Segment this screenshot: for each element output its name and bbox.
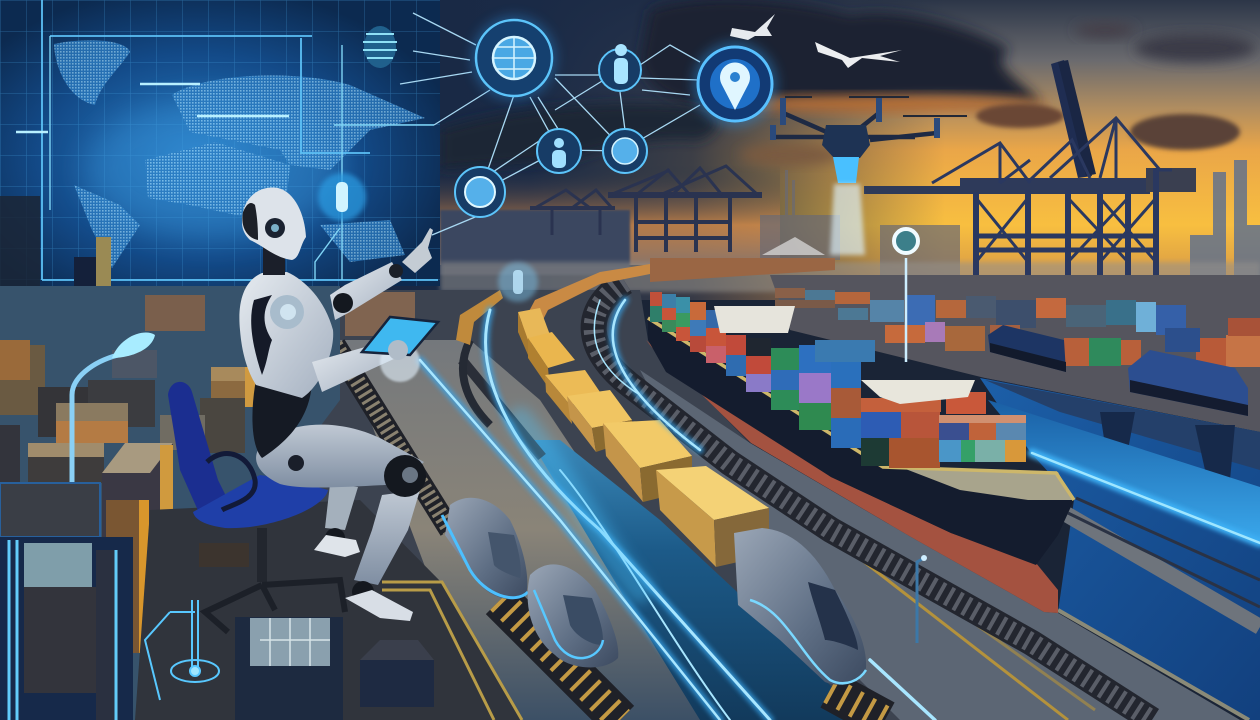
cargo ship	[646, 292, 1074, 613]
rails over water	[1066, 498, 1260, 627]
robot	[239, 187, 438, 621]
torso dark side band	[251, 295, 272, 375]
upper right arm	[330, 262, 402, 320]
tablet	[362, 317, 438, 355]
icon: ribbed sphere	[363, 26, 397, 68]
yellow freight train	[456, 264, 769, 567]
street lamp right	[917, 555, 927, 643]
head side dark	[242, 203, 258, 240]
wagon 0	[518, 308, 550, 355]
neck	[263, 245, 285, 275]
elbow	[333, 293, 353, 313]
water reflections near dock	[985, 380, 1260, 480]
hip joint	[288, 455, 304, 471]
right platform	[640, 370, 1240, 720]
yellow platform line	[823, 530, 1095, 720]
chair base	[205, 580, 345, 632]
main curved track	[594, 282, 1152, 720]
map inner frame	[50, 36, 434, 280]
small far track	[462, 360, 542, 457]
railway tracks	[335, 282, 1152, 720]
wrist	[389, 264, 403, 278]
blue lit strip	[530, 440, 885, 720]
icon: globe node	[472, 16, 556, 100]
ship bridge forward	[861, 380, 975, 404]
track beside platform	[335, 345, 450, 530]
ship hull red underside	[646, 340, 1058, 613]
front locomotive	[734, 528, 866, 685]
icon: globe node lower	[455, 167, 505, 217]
container stacks	[650, 292, 1026, 468]
curved far rail	[463, 340, 490, 425]
icon: person on map	[318, 173, 366, 221]
drones	[730, 14, 967, 255]
pod track	[500, 600, 620, 720]
tablet glow	[380, 342, 420, 382]
world map	[54, 40, 425, 268]
edge strip by water	[1058, 610, 1249, 720]
left holographic panel	[0, 0, 440, 286]
small drone right	[815, 42, 902, 68]
wagon 1	[528, 332, 575, 390]
main drone	[773, 97, 967, 183]
ground	[0, 290, 1240, 720]
glowing quay line	[1032, 453, 1260, 543]
glowing water band	[988, 400, 1260, 543]
ship deck rail	[648, 318, 1074, 500]
shoulder joint	[270, 295, 304, 329]
icon: globe node small	[603, 129, 647, 173]
sky background	[0, 0, 1260, 300]
pointing hand	[402, 228, 433, 273]
wagon 5	[656, 466, 769, 567]
crane: large foreground gantry	[864, 60, 1196, 290]
lower-left city behind yard	[0, 196, 111, 343]
far leg	[325, 484, 358, 530]
office chair	[168, 382, 345, 632]
ear sensor	[265, 218, 285, 238]
robot platform	[135, 500, 522, 720]
icon: small track node	[498, 262, 538, 302]
far wagons left line	[456, 290, 503, 345]
lit platform	[340, 340, 720, 720]
ship hull black topsides	[648, 318, 1074, 565]
ship foredeck	[903, 468, 1073, 500]
chair backrest	[168, 382, 228, 515]
hand on tablet	[388, 340, 408, 360]
head	[242, 187, 306, 260]
ship bridge aft	[714, 306, 795, 333]
glowing route lines	[420, 300, 935, 720]
water	[980, 378, 1260, 720]
torso	[239, 272, 333, 398]
wagon 4	[603, 420, 692, 502]
yellow platform marking	[382, 582, 522, 720]
small drone left	[730, 14, 775, 40]
wagon 3	[567, 390, 632, 452]
map frame	[42, 0, 438, 280]
wagon 2	[545, 370, 602, 424]
map accent bright lines	[16, 84, 289, 132]
knee joint	[384, 455, 426, 497]
chair seat	[193, 475, 328, 528]
thigh	[256, 425, 424, 488]
icon: location pin node	[693, 42, 777, 126]
front train track	[830, 690, 885, 720]
small transport pod near	[528, 564, 618, 667]
icon: person node centre	[537, 129, 581, 173]
chair column	[257, 528, 267, 582]
small equipment box	[360, 640, 434, 707]
dock locomotives	[988, 325, 1248, 416]
network links	[400, 13, 700, 235]
large containers left foreground	[0, 443, 173, 720]
far wagons right line	[518, 264, 650, 345]
network icons	[318, 13, 777, 302]
blue light bars left	[9, 540, 116, 720]
drone light beam	[830, 184, 865, 255]
left yard ground haze	[0, 286, 340, 720]
left yard containers	[0, 292, 415, 483]
far dock and containers	[650, 258, 1260, 470]
map centre glow	[85, 100, 345, 240]
crane: mid-distance gantries	[530, 166, 762, 252]
foot	[345, 581, 413, 621]
beacon pole	[894, 229, 918, 362]
icon: floor hologram	[145, 600, 219, 700]
box under chair	[199, 543, 249, 567]
lamp post left	[72, 333, 155, 520]
far foot	[314, 528, 360, 557]
icon: person node top	[599, 44, 641, 91]
city skyline	[440, 160, 1260, 295]
shin	[354, 490, 420, 585]
small transport pod far	[442, 498, 528, 599]
lower arm	[312, 340, 396, 392]
waist mechanics	[252, 370, 312, 458]
chair arm	[207, 454, 255, 510]
equipment box	[235, 617, 343, 720]
